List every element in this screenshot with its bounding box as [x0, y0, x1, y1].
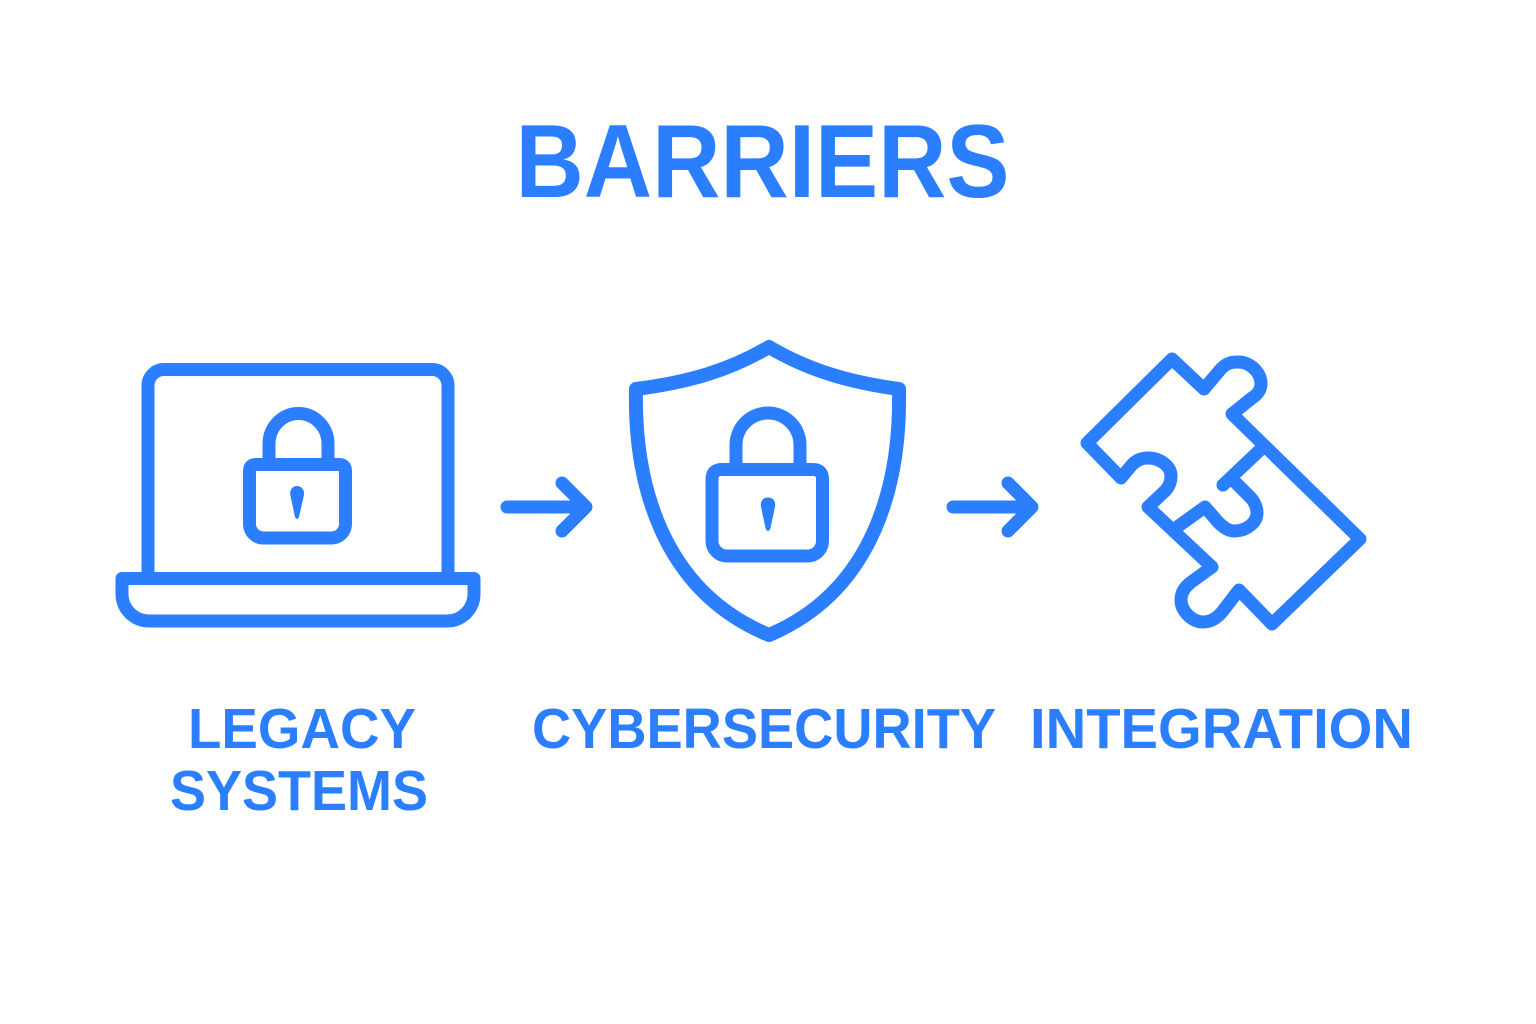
label: cybersecurity: CYBERSECURITY: [532, 697, 996, 761]
icon: shield with lock: [636, 347, 899, 635]
label: legacy systems: [170, 697, 428, 823]
label: legacy systems: LEGACY: [188, 697, 416, 761]
icon: puzzle pieces: [1087, 359, 1360, 624]
title: BARRIERS: [516, 104, 1010, 220]
arrow: cybersecurity to integration: [953, 483, 1032, 531]
label: legacy systems: SYSTEMS: [170, 759, 428, 823]
icon: laptop with lock: [122, 370, 474, 621]
label: integration: INTEGRATION: [1030, 697, 1413, 761]
arrow: legacy to cybersecurity: [507, 483, 586, 531]
